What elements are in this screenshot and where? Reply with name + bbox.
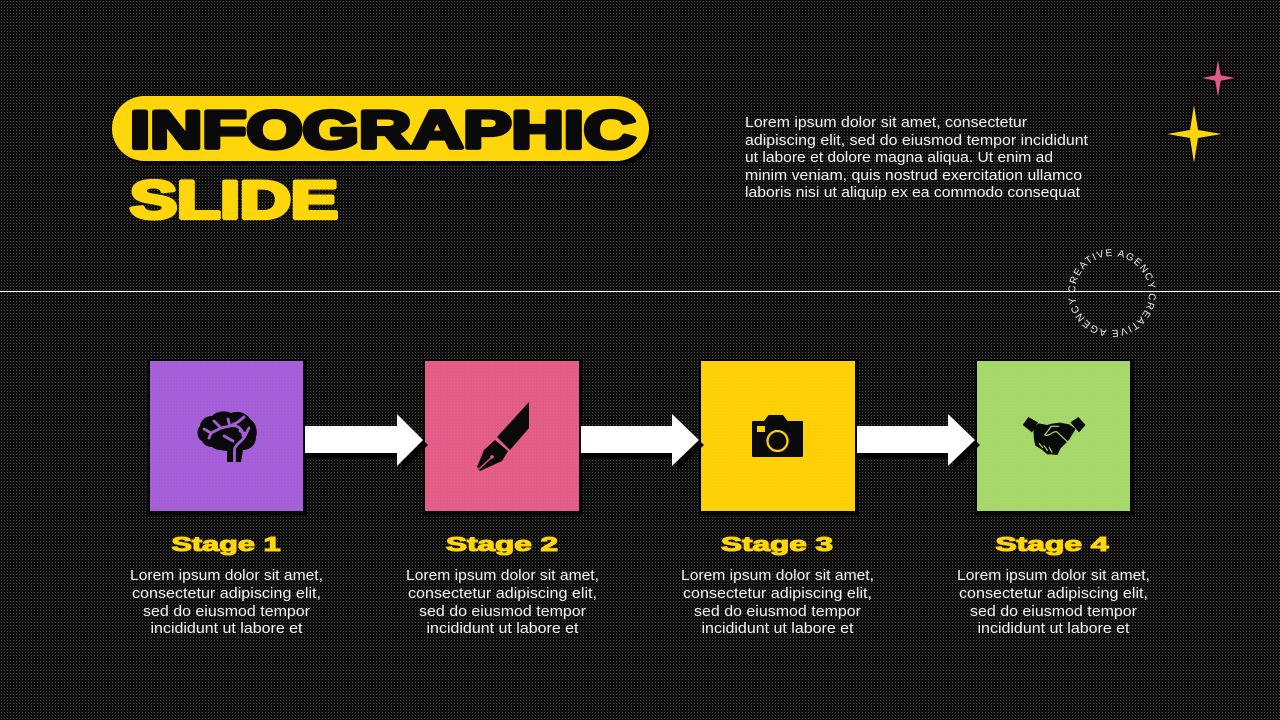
title word: slide: SLIDE <box>130 171 338 230</box>
panel: stage 1 <box>130 359 323 637</box>
icon: pink sparkle <box>1192 50 1244 106</box>
icon: handshake <box>1023 417 1086 455</box>
stage 1 text: Lorem ipsum dolor sit amet, <box>130 568 323 584</box>
stage 4 square <box>975 359 1134 515</box>
stage 2 heading: Stage 2 <box>446 534 558 556</box>
intro text block <box>745 115 1088 201</box>
stage 3 square <box>699 359 859 515</box>
icon: brain <box>198 411 257 462</box>
panel: stage 4 <box>957 359 1150 637</box>
stage 2 text: sed do eiusmod tempor <box>419 604 586 620</box>
stage 1 text: consectetur adipiscing elit, <box>132 586 321 602</box>
stage 1 square <box>148 359 307 515</box>
arrow: stage 3 to 4 <box>857 414 980 471</box>
stage 2 square <box>423 359 583 515</box>
icon: yellow sparkle <box>1157 95 1232 172</box>
circular badge text: creative agency <box>1068 249 1156 337</box>
intro text block: laboris nisi ut aliquip ex ea commodo consequat <box>745 185 1080 201</box>
title: infographic slide <box>112 96 653 230</box>
intro text block: minim veniam, quis nostrud exercitation ullamco <box>745 168 1082 184</box>
intro text block: ut labore et dolore magna aliqua. Ut enim ad <box>745 150 1053 166</box>
title pill: infographic <box>112 96 653 165</box>
stage 1 text: sed do eiusmod tempor <box>143 604 310 620</box>
stage 3 text: Lorem ipsum dolor sit amet, <box>681 568 874 584</box>
intro text block: adipiscing elit, sed do eiusmod tempor incididunt <box>745 133 1088 149</box>
stage 3 text <box>681 568 874 637</box>
circular badge text: creative agency: CREATIVE AGENCY <box>1068 294 1156 337</box>
stage 3 text: sed do eiusmod tempor <box>694 604 861 620</box>
icon: camera <box>752 415 803 457</box>
stage 2 text <box>406 568 599 637</box>
stage 3 heading: Stage 3 <box>721 534 833 556</box>
stage 4 text: incididunt ut labore et <box>978 621 1130 637</box>
panel: stage 2 <box>406 359 599 637</box>
stage 1 text: incididunt ut labore et <box>150 621 302 637</box>
stage 1 text <box>130 568 323 637</box>
stage 4 text: sed do eiusmod tempor <box>970 604 1137 620</box>
stage 4 text: Lorem ipsum dolor sit amet, <box>957 568 1150 584</box>
intro text block: Lorem ipsum dolor sit amet, consectetur <box>745 115 1027 131</box>
stage 3 text: incididunt ut labore et <box>702 621 854 637</box>
title pill: infographic: INFOGRAPHIC <box>130 101 636 160</box>
stage 4 text: consectetur adipiscing elit, <box>959 586 1148 602</box>
stage 4 text <box>957 568 1150 637</box>
stage 2 text: incididunt ut labore et <box>426 621 578 637</box>
stage 3 text: consectetur adipiscing elit, <box>683 586 872 602</box>
stage 4 heading: Stage 4 <box>996 534 1110 556</box>
panel: stage 3 <box>681 359 874 637</box>
circular badge text: creative agency: CREATIVE AGENCY <box>1068 249 1156 292</box>
stage 2 text: consectetur adipiscing elit, <box>408 586 597 602</box>
arrow: stage 2 to 3 <box>581 414 704 471</box>
icon: fountain pen <box>477 402 529 471</box>
arrow: stage 1 to 2 <box>305 414 428 471</box>
stage 1 heading: Stage 1 <box>172 534 280 556</box>
stage 2 text: Lorem ipsum dolor sit amet, <box>406 568 599 584</box>
